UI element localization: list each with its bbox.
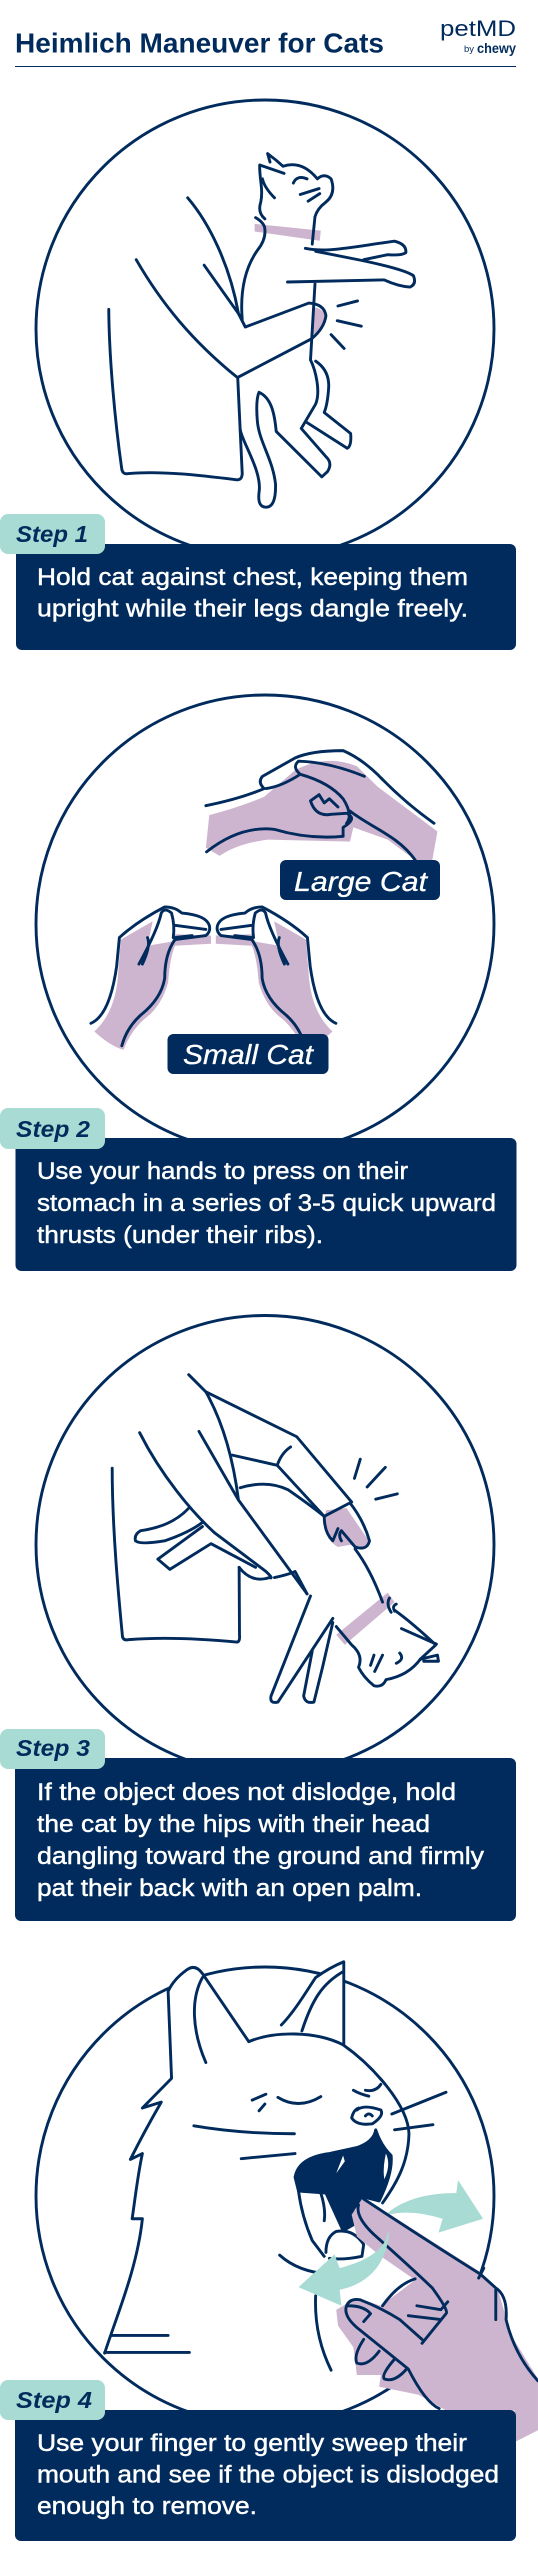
- logo: petMD by chewy: petMD: [440, 16, 516, 41]
- panel: step 1: Step 1: [16, 521, 88, 547]
- panel: step 2: [0, 695, 516, 1271]
- panel: step 4: [0, 1962, 538, 2541]
- step 4 text: [37, 2430, 499, 2520]
- arrow: right sweep: [388, 2180, 483, 2233]
- step 3 text: [37, 1779, 485, 1902]
- step 1 text: Hold cat against chest, keeping them: [37, 564, 468, 591]
- hand: [336, 2199, 538, 2442]
- step 2 text: stomach in a series of 3-5 quick upward: [37, 1190, 496, 1217]
- step 3 text: dangling toward the ground and firmly: [37, 1843, 485, 1870]
- panel: step 4: Step 4: [16, 2387, 92, 2413]
- label: small cat: [168, 1034, 328, 1074]
- step 4 text: mouth and see if the object is dislodged: [37, 2462, 499, 2488]
- label: small cat: Small Cat: [183, 1039, 314, 1070]
- step 1 text: [37, 564, 468, 622]
- step 4 text: enough to remove.: [37, 2493, 257, 2520]
- mouth: [295, 2130, 391, 2231]
- illustration: cat with open mouth and finger sweep: [105, 1962, 538, 2442]
- panel: step 3: [0, 1316, 516, 1921]
- icon: impact lines: [354, 1459, 397, 1499]
- right hand: [216, 907, 336, 1050]
- logo: petMD by chewy: [440, 16, 516, 56]
- step 2 text: Use your hands to press on their: [37, 1158, 408, 1185]
- step 3 text: pat their back with an open palm.: [37, 1875, 422, 1902]
- illustration: small cat hands: [91, 907, 336, 1050]
- title: Heimlich Maneuver for Cats: [15, 28, 384, 58]
- panel: step 1: [0, 100, 516, 650]
- logo: petMD by chewy: by: [464, 44, 475, 54]
- logo: petMD by chewy: chewy: [477, 40, 516, 56]
- illustration: large cat hand: [206, 751, 437, 860]
- step 3 text: If the object does not dislodge, hold: [37, 1779, 456, 1806]
- illustration: holding cat against chest: [109, 154, 415, 507]
- step 4 text: Use your finger to gently sweep their: [37, 2430, 467, 2457]
- label: large cat: [280, 860, 440, 900]
- left hand: [91, 907, 211, 1050]
- step 2 text: thrusts (under their ribs).: [37, 1222, 323, 1249]
- step 2 text: [37, 1158, 496, 1249]
- label: large cat: Large Cat: [294, 866, 428, 897]
- step 1 text: upright while their legs dangle freely.: [37, 596, 468, 622]
- panel: step 3: Step 3: [16, 1735, 90, 1761]
- arrow: left sweep: [298, 2233, 389, 2306]
- illustration: holding cat upside down: [112, 1375, 438, 1702]
- step 3 text: the cat by the hips with their head: [37, 1811, 430, 1838]
- icon: impact lines: [331, 301, 361, 349]
- panel: step 2: Step 2: [16, 1116, 90, 1142]
